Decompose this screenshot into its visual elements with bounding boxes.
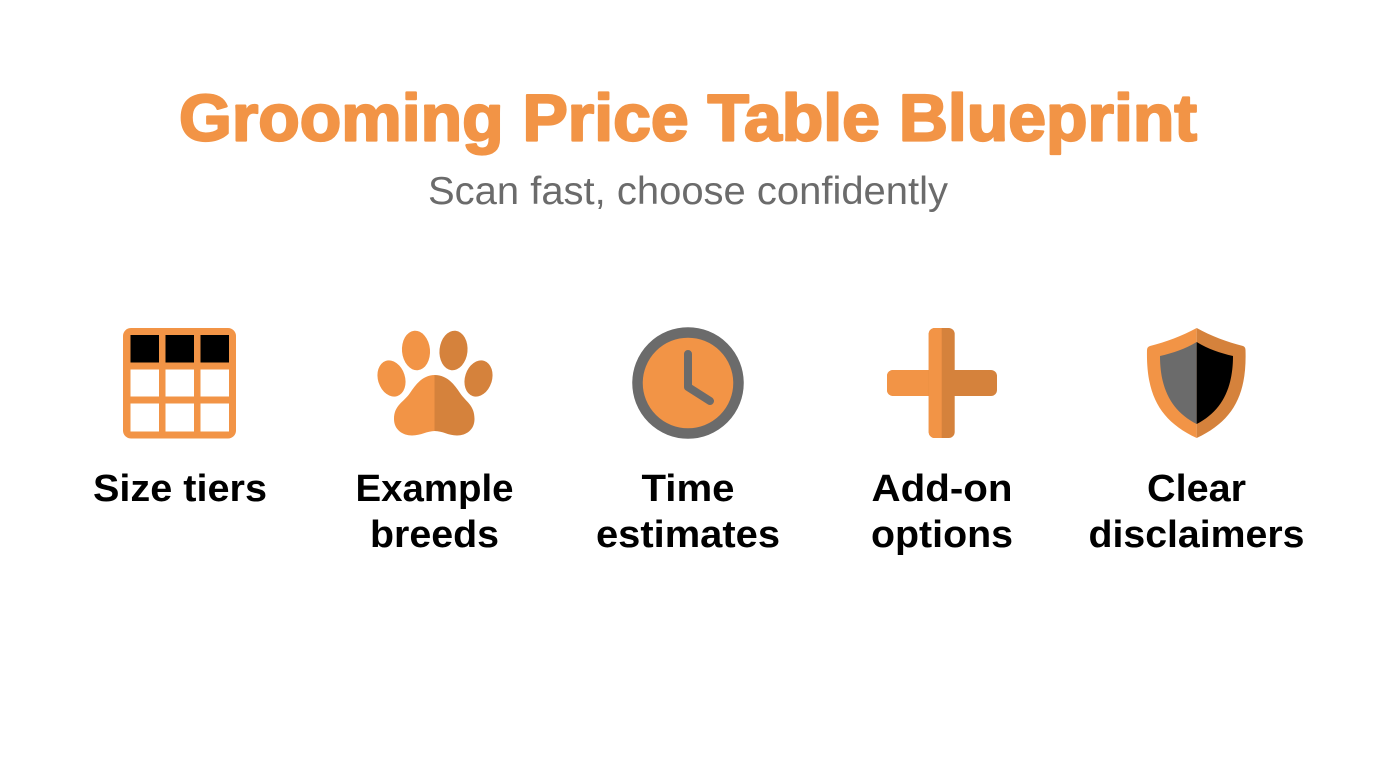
title: Grooming Price Table Blueprint: [179, 80, 1197, 154]
icon: shield: [1147, 328, 1246, 438]
label: time estimates: [596, 468, 780, 556]
item: clear disclaimers: [1088, 328, 1304, 556]
label: time estimates: estimates: [596, 514, 780, 556]
label: size tiers: Size tiers: [93, 468, 267, 510]
label: add-on options: Add-on: [872, 468, 1012, 510]
icon: table grid: [123, 328, 236, 438]
item: add-on options: [871, 328, 1013, 556]
label: add-on options: [871, 468, 1013, 556]
item: time estimates: [596, 332, 780, 556]
icon: paw: [373, 329, 497, 436]
label: example breeds: Example: [356, 468, 514, 510]
item: size tiers: [93, 328, 267, 510]
subtitle: Scan fast, choose confidently: [428, 170, 949, 213]
label: example breeds: [356, 468, 514, 556]
label: add-on options: options: [871, 514, 1013, 556]
label: clear disclaimers: Clear: [1147, 468, 1246, 510]
label: clear disclaimers: disclaimers: [1088, 514, 1304, 556]
icon: clock: [638, 332, 738, 434]
label: time estimates: Time: [642, 468, 734, 510]
icon: plus: [887, 328, 997, 438]
item: example breeds: [356, 329, 514, 556]
label: example breeds: breeds: [370, 514, 499, 556]
label: clear disclaimers: [1088, 468, 1304, 556]
